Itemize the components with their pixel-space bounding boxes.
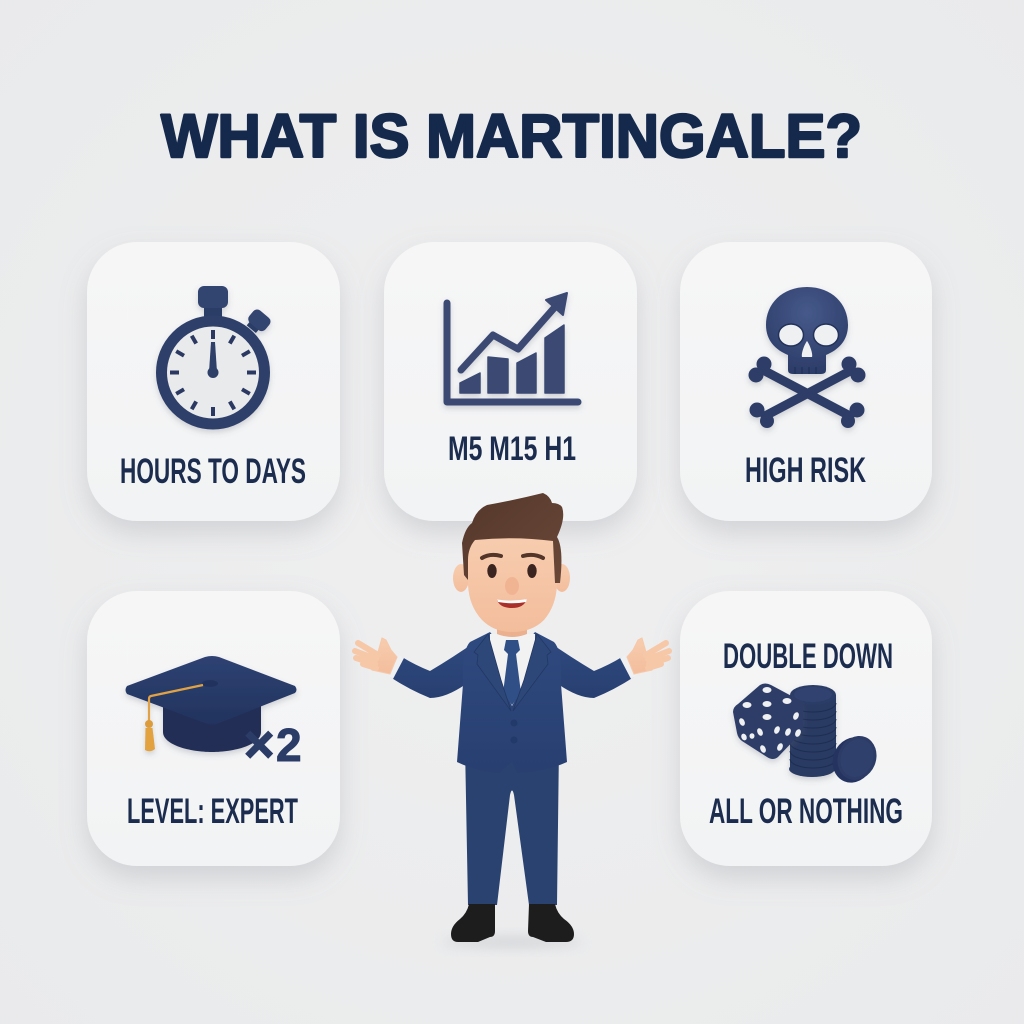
panel: double down: [680, 591, 932, 866]
icon: dice: [733, 684, 803, 759]
right hand: [627, 638, 669, 674]
tie: [503, 640, 521, 705]
nose: [505, 577, 519, 595]
panel: high risk: [680, 242, 932, 521]
right arm: [546, 640, 634, 698]
jacket buttons: [510, 720, 518, 744]
shoes: [451, 904, 574, 942]
icon: leaning chip: [826, 730, 883, 789]
label: hours to days: HOURS TO DAYS: [120, 452, 306, 491]
icon: graduation cap: [126, 656, 296, 752]
icon: growth chart: [447, 293, 578, 402]
ears: [453, 564, 570, 592]
jacket: [457, 632, 567, 773]
icon: stopwatch: [162, 286, 273, 424]
label: timeframes: M5 M15 H1: [448, 430, 576, 468]
panel: timeframes: [384, 242, 637, 521]
icon text: times two: [244, 716, 302, 774]
title: WHAT IS MARTINGALE?: [161, 102, 862, 170]
shirt: [490, 634, 535, 706]
left cuff: [388, 655, 404, 679]
teeth: [497, 599, 527, 603]
eyebrows: [482, 555, 543, 558]
icon text: times two: 2: [276, 719, 302, 771]
label: all or nothing: ALL OR NOTHING: [709, 792, 903, 831]
label: high risk: HIGH RISK: [745, 451, 866, 490]
panel: hours to days: [87, 242, 340, 521]
head: [468, 535, 557, 632]
hair: [462, 493, 563, 583]
label: level expert: LEVEL: EXPERT: [127, 792, 298, 831]
icon text: times two: ×: [244, 716, 274, 774]
left hand: [355, 638, 397, 674]
panel: level expert: [87, 591, 340, 866]
trousers: [465, 745, 559, 905]
ground shadow: [442, 937, 582, 947]
label: double down: DOUBLE DOWN: [723, 637, 893, 676]
lapels: [474, 634, 551, 711]
character: businessman: [355, 493, 669, 947]
icon: chip stack: [789, 685, 836, 777]
mouth: [497, 599, 527, 608]
icon: skull and crossbones: [748, 287, 866, 428]
eyes: [487, 564, 537, 578]
right cuff: [620, 655, 636, 679]
left arm: [390, 640, 478, 698]
neck: [497, 625, 527, 637]
